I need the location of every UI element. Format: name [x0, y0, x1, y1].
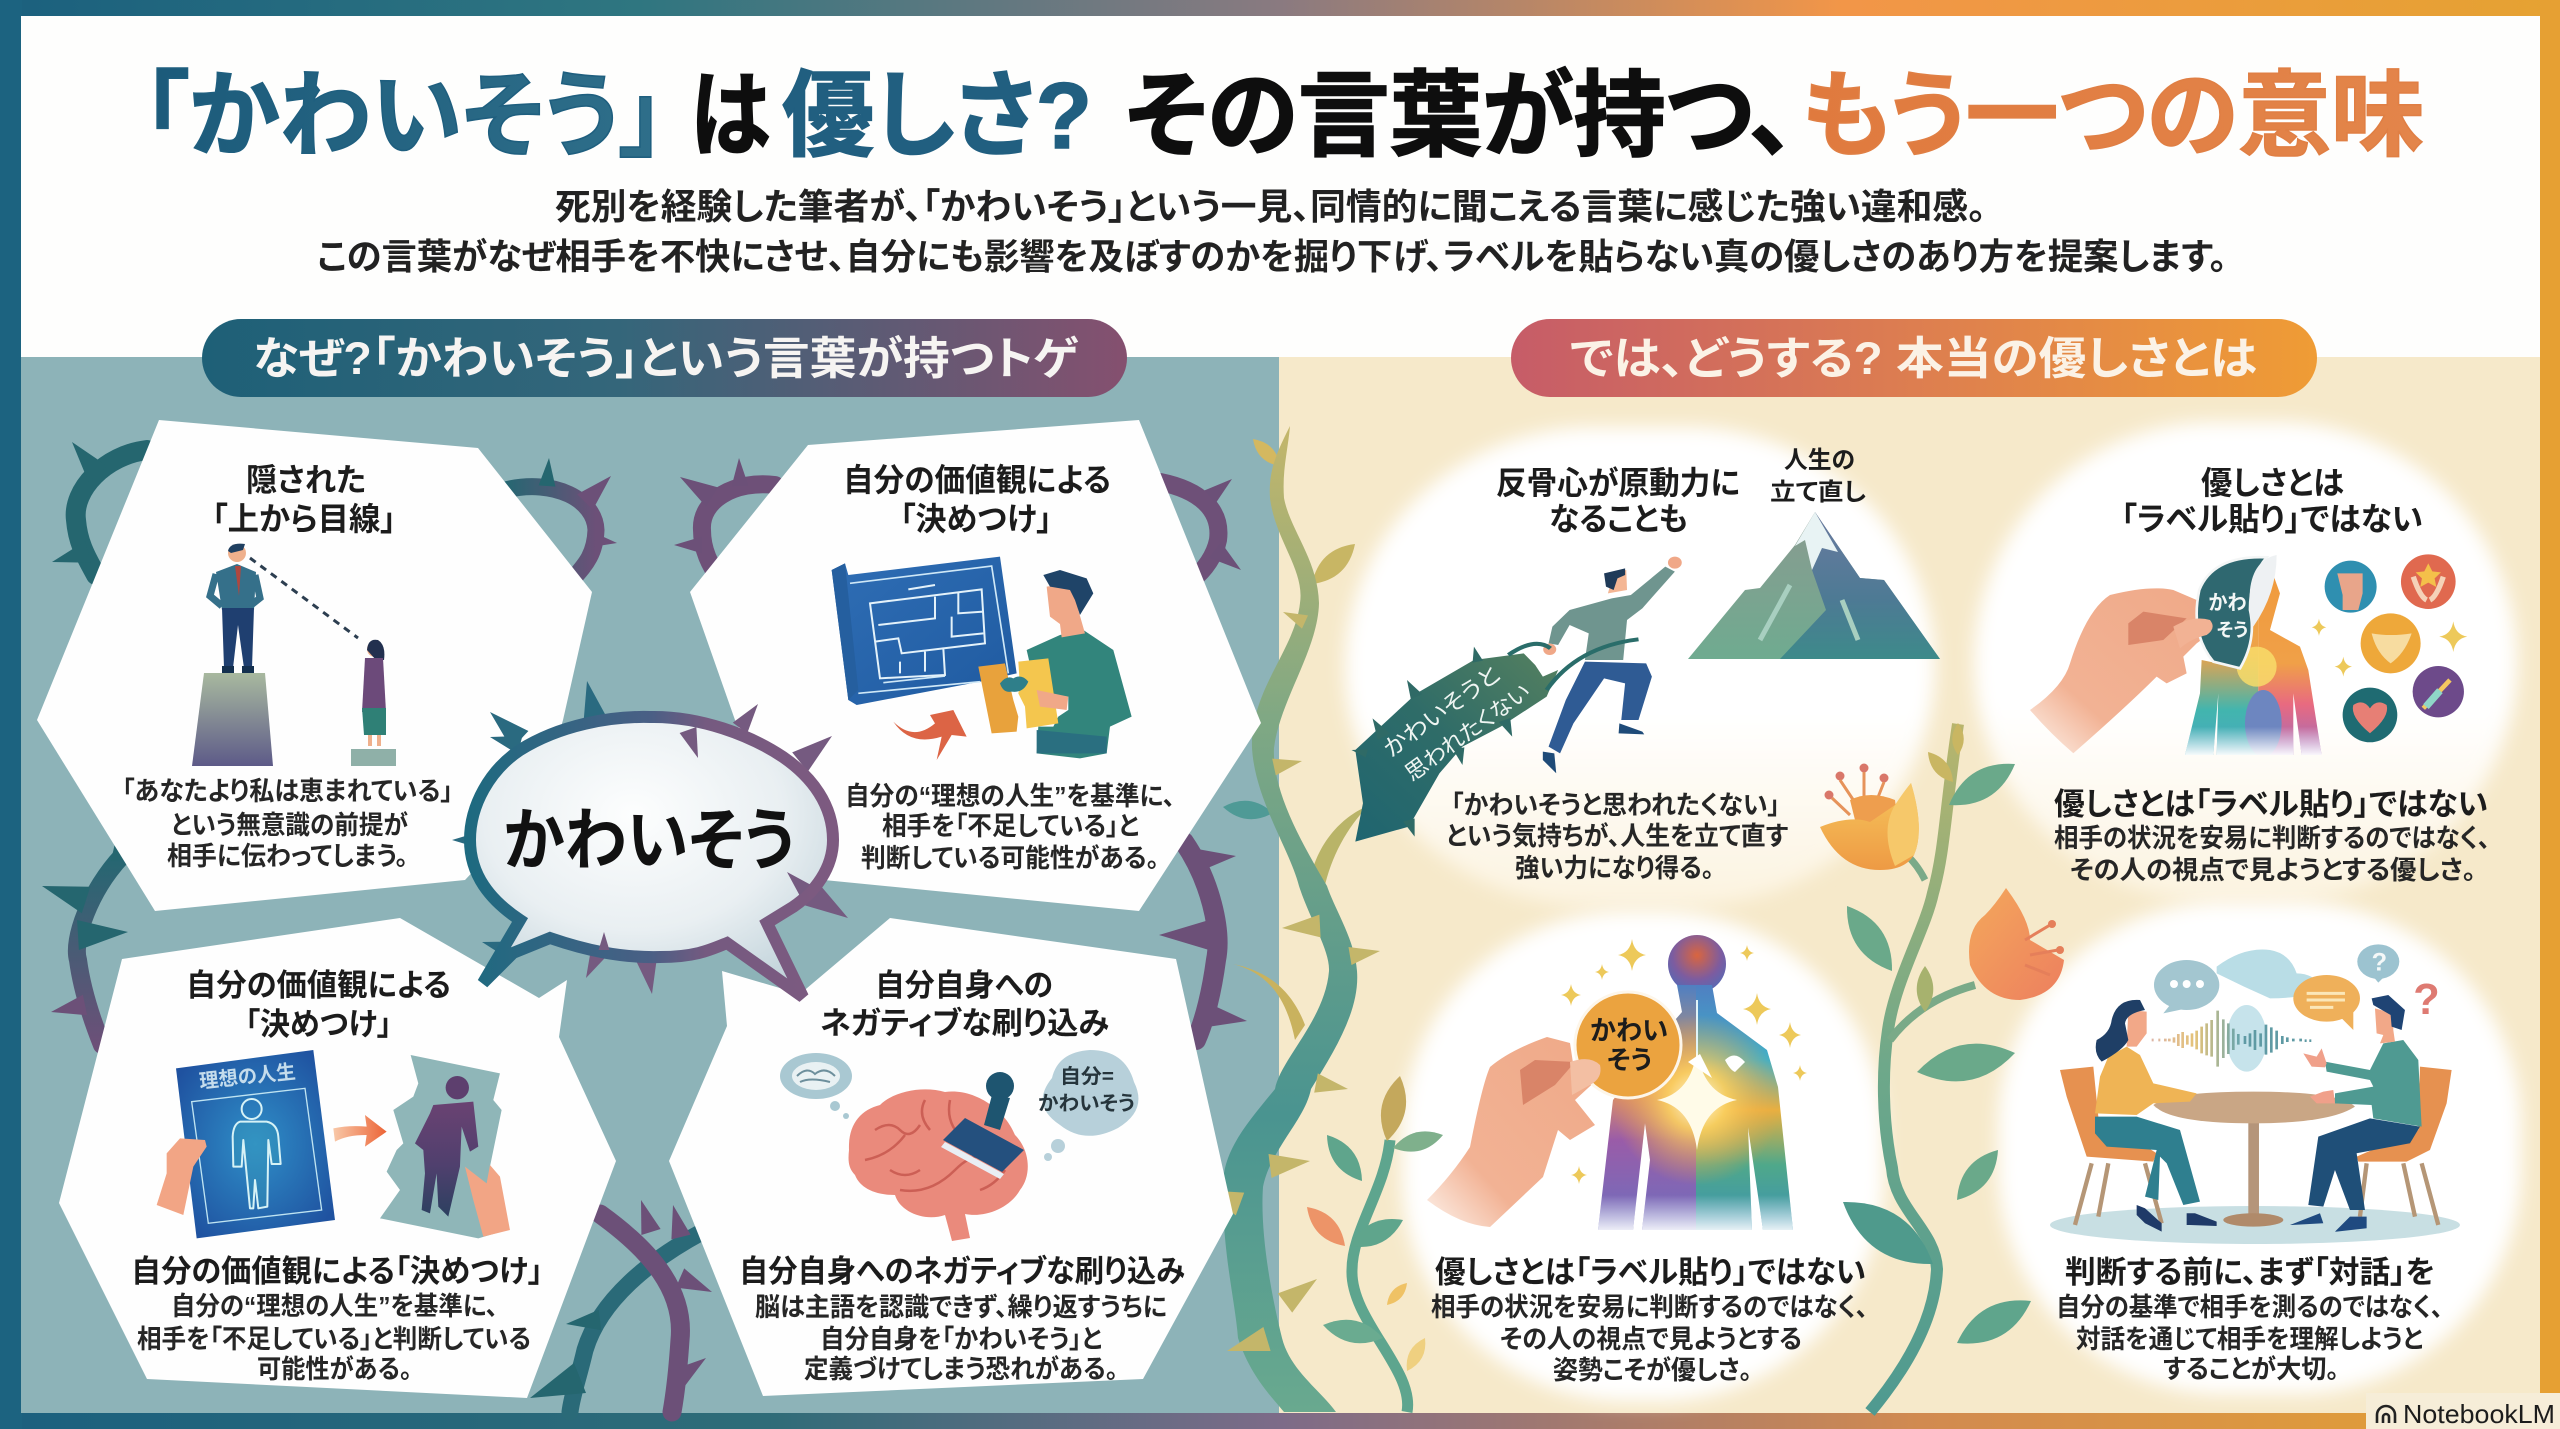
panel: defiance as drive: [1345, 427, 1940, 907]
icon: two people talking at table: [2050, 944, 2460, 1244]
panel: negative imprinting: [669, 918, 1233, 1396]
heading: 隠された: [246, 462, 366, 498]
label: life rebuild: 人生の: [1784, 447, 1855, 474]
title and body text: [2056, 1255, 2443, 1384]
body text: 判断している可能性がある。: [861, 843, 1159, 873]
icon: hand and sticker on glowing body: そう: [1607, 1045, 1652, 1075]
badge: NotebookLM: [2366, 1393, 2560, 1429]
centre flowering vine: [1820, 723, 2064, 1412]
title and body text: することが大切。: [2163, 1354, 2339, 1384]
icon: ideal life card and torn paper: [157, 1050, 510, 1238]
heading: 自分の価値観による: [186, 968, 451, 1003]
heading: なることも: [1549, 501, 1688, 537]
body text: [122, 776, 453, 871]
icon: hand peeling label from rainbow body: かわ: [2208, 591, 2247, 614]
title: もう一つの意味: [1802, 63, 2424, 168]
heading: 優しさとは: [2201, 465, 2344, 501]
panel: kindness is not labelling, glowing body: [1402, 911, 1884, 1401]
heading pill: left: なぜ?「かわいそう」という言葉が持つトゲ: [253, 333, 1078, 384]
body text: 強い力になり得る。: [1515, 853, 1714, 883]
panel: right background: [1279, 357, 2540, 1413]
intro text: [317, 186, 2227, 277]
heading pill: right: では、どうする? 本当の優しさとは: [1570, 333, 2257, 384]
title and body text: 自分の“理想の人生”を基準に、: [171, 1291, 498, 1321]
icon: hand and sticker on glowing body: [1427, 935, 1807, 1235]
title and body text: 対話を通じて相手を理解しようと: [2076, 1324, 2423, 1354]
heading pill: right: [1511, 319, 2317, 397]
title and body text: その人の視点で見ようとする: [1500, 1324, 1802, 1354]
heading: [186, 968, 451, 1042]
icon: brain stamped: かわいそう: [1038, 1092, 1135, 1115]
title and body text: 自分自身を「かわいそう」と: [820, 1324, 1102, 1354]
body text: 自分の“理想の人生”を基準に、: [845, 781, 1175, 811]
body text: という気持ちが、人生を立て直す: [1446, 821, 1788, 851]
title and body text: 自分の基準で相手を測るのではなく、: [2056, 1292, 2443, 1322]
heading: 反骨心が原動力に: [1496, 465, 1740, 501]
body text: 相手の状況を安易に判断するのではなく、: [2054, 823, 2490, 853]
icon: hand peeling label from rainbow body: そう: [2217, 620, 2248, 641]
label: life rebuild: 立て直し: [1770, 479, 1866, 506]
heading pill: left: [202, 319, 1127, 397]
panel: kindness is not labelling, peeling: [1974, 422, 2517, 902]
badge: NotebookLM: NotebookLM: [2403, 1399, 2555, 1429]
panel: dialogue first: [1998, 902, 2521, 1394]
body text: 「かわいそうと思われたくない」: [1451, 790, 1780, 820]
icon: hand and sticker on glowing body: かわい: [1590, 1016, 1668, 1046]
title: 優しさ?: [782, 63, 1092, 168]
small vine with leaves: [1300, 1074, 1445, 1412]
heading: ネガティブな刷り込み: [820, 1006, 1109, 1041]
icon: mountain: [1688, 512, 1940, 659]
title and body text: 相手の状況を安易に判断するのではなく、: [1431, 1292, 1868, 1322]
body text: [1446, 790, 1788, 883]
title and body text: [131, 1254, 543, 1384]
label: life rebuild: [1770, 447, 1866, 506]
icon: blueprint and person with torn puzzle: [832, 557, 1132, 760]
icon: two people talking at table: ?: [2372, 949, 2387, 977]
title and body text: 脳は主語を認識できず、繰り返すうちに: [755, 1292, 1167, 1322]
title and body text: 自分の価値観による「決めつけ」: [131, 1254, 543, 1289]
icon: two people talking at table: ?: [2413, 976, 2440, 1024]
title: その言葉が持つ、: [1125, 63, 1795, 168]
body text: 相手に伝わってしまう。: [167, 841, 408, 871]
central thorny speech bubble: かわいそう: [503, 803, 795, 879]
icon: runner with thorn banner: [1350, 557, 1682, 842]
heading: 「決めつけ」: [900, 501, 1052, 537]
body text: [2054, 787, 2490, 885]
icon: man on pedestal looking down: [192, 544, 396, 766]
heading: 「上から目線」: [212, 501, 396, 537]
title and body text: 判断する前に、まず「対話」を: [2065, 1255, 2435, 1290]
title and body text: [739, 1254, 1185, 1384]
heading: 「決めつけ」: [245, 1007, 392, 1042]
icon: brain stamped: [780, 1050, 1138, 1241]
title and body text: 優しさとは「ラベル貼り」ではない: [1435, 1255, 1866, 1290]
panel: left background: [21, 357, 1280, 1413]
icon: brain stamped: 自分=: [1060, 1065, 1114, 1088]
heading: [843, 462, 1111, 537]
body text: その人の視点で見ようとする優しさ。: [2070, 855, 2476, 885]
body text: [845, 781, 1175, 873]
heading: 自分自身への: [875, 968, 1053, 1003]
panel: hidden condescension: [37, 420, 592, 911]
panel: ideal life judgement: [59, 918, 616, 1398]
heading: [820, 968, 1109, 1041]
title and body text: [1431, 1255, 1868, 1385]
main thorn vine: [1198, 426, 1382, 1412]
title: 「かわいそう」: [143, 63, 665, 168]
heading: 自分の価値観による: [843, 462, 1111, 498]
title: [143, 63, 2424, 168]
title and body text: 可能性がある。: [257, 1354, 412, 1384]
central thorny speech bubble: [452, 679, 856, 997]
icon: orange flower: [1969, 888, 2064, 1000]
panel: value judgement with blueprint: [690, 420, 1261, 911]
body text: 相手を「不足している」と: [882, 811, 1139, 841]
title and body text: 自分自身へのネガティブな刷り込み: [739, 1254, 1185, 1289]
body text: 優しさとは「ラベル貼り」ではない: [2054, 787, 2488, 822]
icon: ideal life card and torn paper: 理想の人生: [198, 1060, 297, 1093]
icon: runner with thorn banner: 思われたくない: [1400, 679, 1535, 786]
intro text: この言葉がなぜ相手を不快にさせ、自分にも影響を及ぼすのかを掘り下げ、ラベルを貼らない真の優しさのあり方を提案します。: [317, 236, 2227, 277]
heading: 「ラベル貼り」ではない: [2121, 501, 2423, 537]
heading: [2121, 465, 2423, 537]
thorn branches: left panel: [38, 434, 1249, 1413]
body text: 「あなたより私は恵まれている」: [122, 776, 453, 806]
title and body text: 姿勢こそが優しさ。: [1553, 1355, 1752, 1385]
icon: yellow tulip: [1820, 764, 1919, 870]
icon: runner with thorn banner: かわいそうと: [1379, 660, 1505, 762]
heading: [212, 462, 396, 537]
intro text: 死別を経験した筆者が、「かわいそう」という一見、同情的に聞こえる言葉に感じた強い違和感。: [555, 186, 1986, 227]
icon: hand peeling label from rainbow body: [2030, 554, 2467, 757]
title and body text: 相手を「不足している」と判断している: [137, 1324, 531, 1354]
heading: [1496, 465, 1740, 537]
body text: という無意識の前提が: [171, 810, 408, 840]
title: は: [690, 63, 770, 168]
title and body text: 定義づけてしまう恐れがある。: [804, 1354, 1118, 1384]
